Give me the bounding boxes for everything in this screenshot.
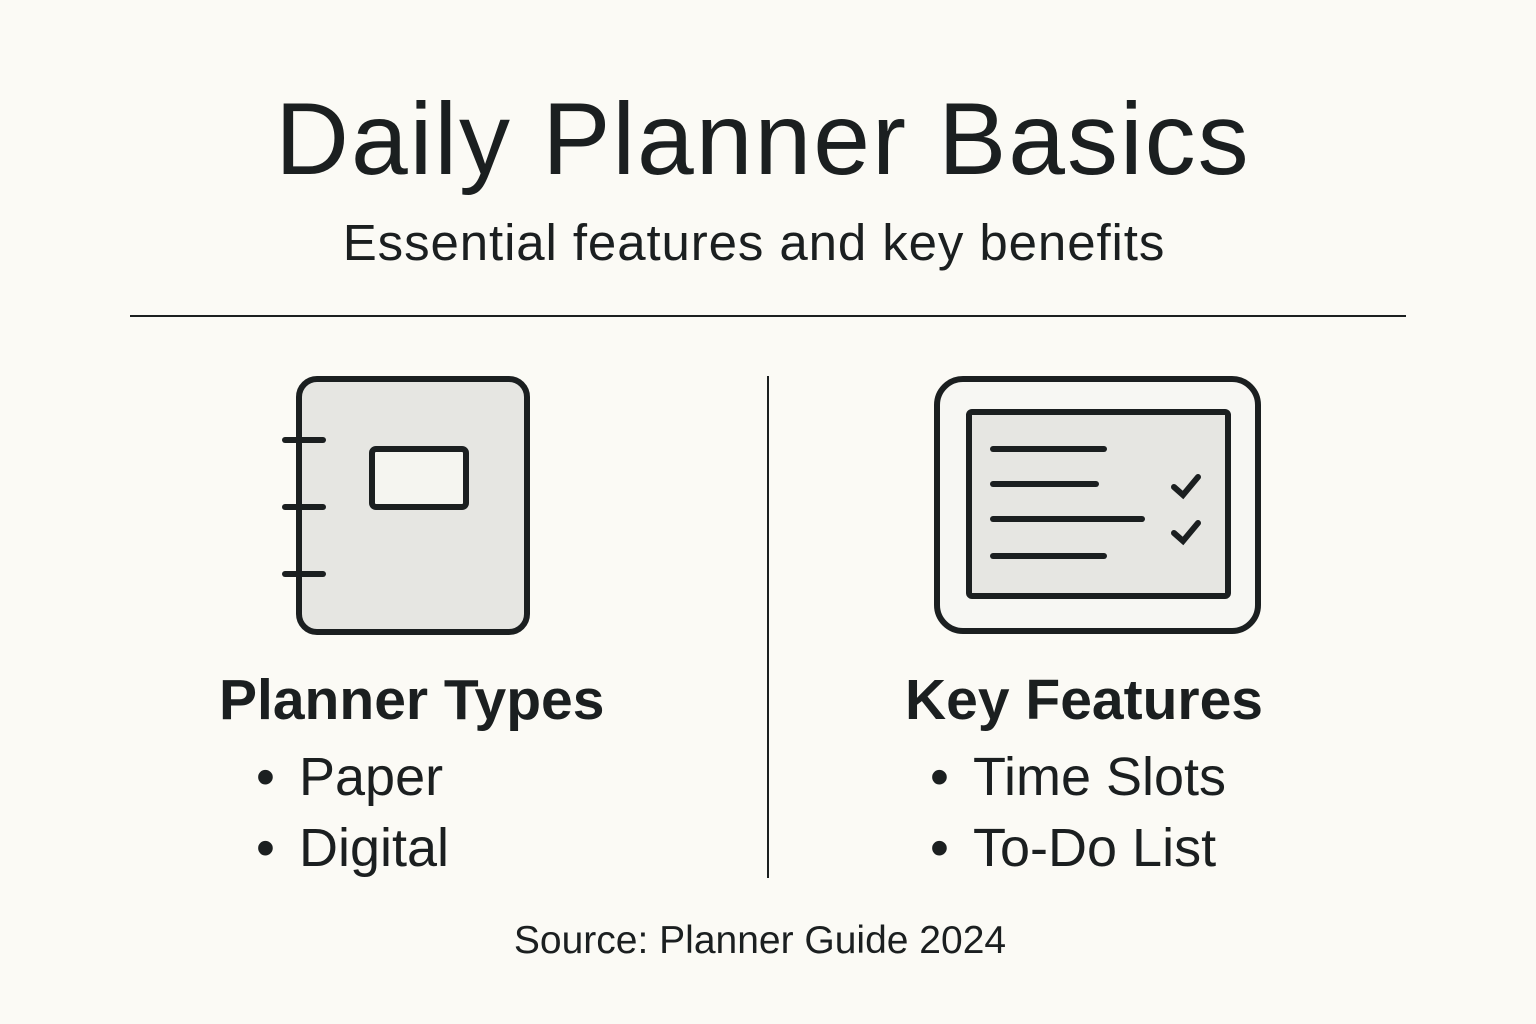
list: key features: •	[930, 747, 949, 807]
list: key features	[930, 747, 1226, 878]
list: key features: •	[930, 818, 949, 878]
list: planner types: Paper	[299, 747, 443, 807]
list: planner types: Digital	[299, 818, 449, 878]
list: planner types	[256, 747, 449, 878]
list: planner types: •	[256, 747, 275, 807]
heading: planner types: Planner Types	[219, 668, 604, 732]
list: key features: To-Do List	[973, 818, 1216, 878]
heading: key features: Key Features	[905, 668, 1263, 732]
subtitle: Essential features and key benefits	[343, 214, 1165, 271]
panel: planner types	[219, 376, 604, 878]
list: planner types: •	[256, 818, 275, 878]
source note: Source: Planner Guide 2024	[514, 919, 1006, 962]
list: key features: Time Slots	[973, 747, 1226, 807]
icon: notebook	[282, 376, 530, 635]
panel: key features	[905, 376, 1263, 878]
icon: checklist screen	[934, 376, 1261, 634]
title: Daily Planner Basics	[275, 82, 1251, 196]
